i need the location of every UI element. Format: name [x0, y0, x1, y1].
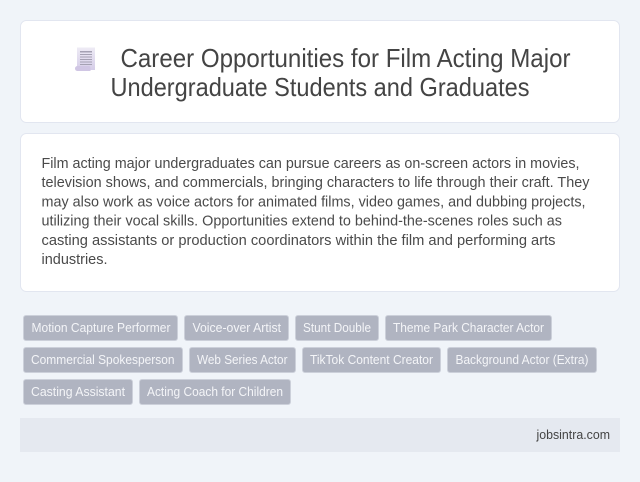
tag: Acting Coach for Children — [147, 385, 283, 399]
tag: Theme Park Character Actor — [393, 321, 544, 335]
tag — [184, 316, 288, 340]
tag — [448, 348, 596, 372]
tag: Stunt Double — [303, 321, 371, 335]
title text: Undergraduate Students and Graduates — [110, 72, 530, 102]
tag — [24, 348, 182, 372]
description text: utilizing their vocal skills. Opportunities extend to behind-the-scenes roles such as — [42, 214, 562, 230]
tag — [190, 348, 296, 372]
description text: casting assistants or production coordinators within the film and performing arts — [42, 233, 556, 249]
description text: Film acting major undergraduates can pursue careers as on-screen actors in movies, — [42, 156, 580, 172]
description panel — [20, 134, 620, 292]
footer — [20, 418, 620, 452]
title text: Career Opportunities for Film Acting Major — [120, 43, 571, 73]
tag — [302, 348, 440, 372]
tag — [386, 316, 552, 340]
description text — [42, 156, 590, 268]
tag — [296, 316, 378, 340]
description text: may also work as voice actors for animated films, video games, and dubbing projects, — [42, 194, 586, 210]
tag: Web Series Actor — [197, 353, 288, 367]
tag: TikTok Content Creator — [310, 353, 433, 367]
description text: industries. — [42, 252, 108, 268]
tag — [24, 316, 178, 340]
tag: Voice-over Artist — [192, 321, 281, 335]
description text: television shows, and commercials, bringing characters to life through their craft. They — [42, 175, 590, 191]
tag — [24, 380, 132, 404]
title text — [110, 43, 571, 102]
tag: Background Actor (Extra) — [456, 353, 588, 367]
title panel — [20, 20, 620, 122]
tag: Motion Capture Performer — [32, 321, 170, 335]
icon: paper scroll — [75, 48, 95, 71]
tag: Commercial Spokesperson — [31, 353, 174, 367]
tags — [24, 316, 596, 404]
tag — [140, 380, 290, 404]
footer: jobsintra.com — [536, 428, 610, 442]
tag: Casting Assistant — [31, 385, 125, 399]
